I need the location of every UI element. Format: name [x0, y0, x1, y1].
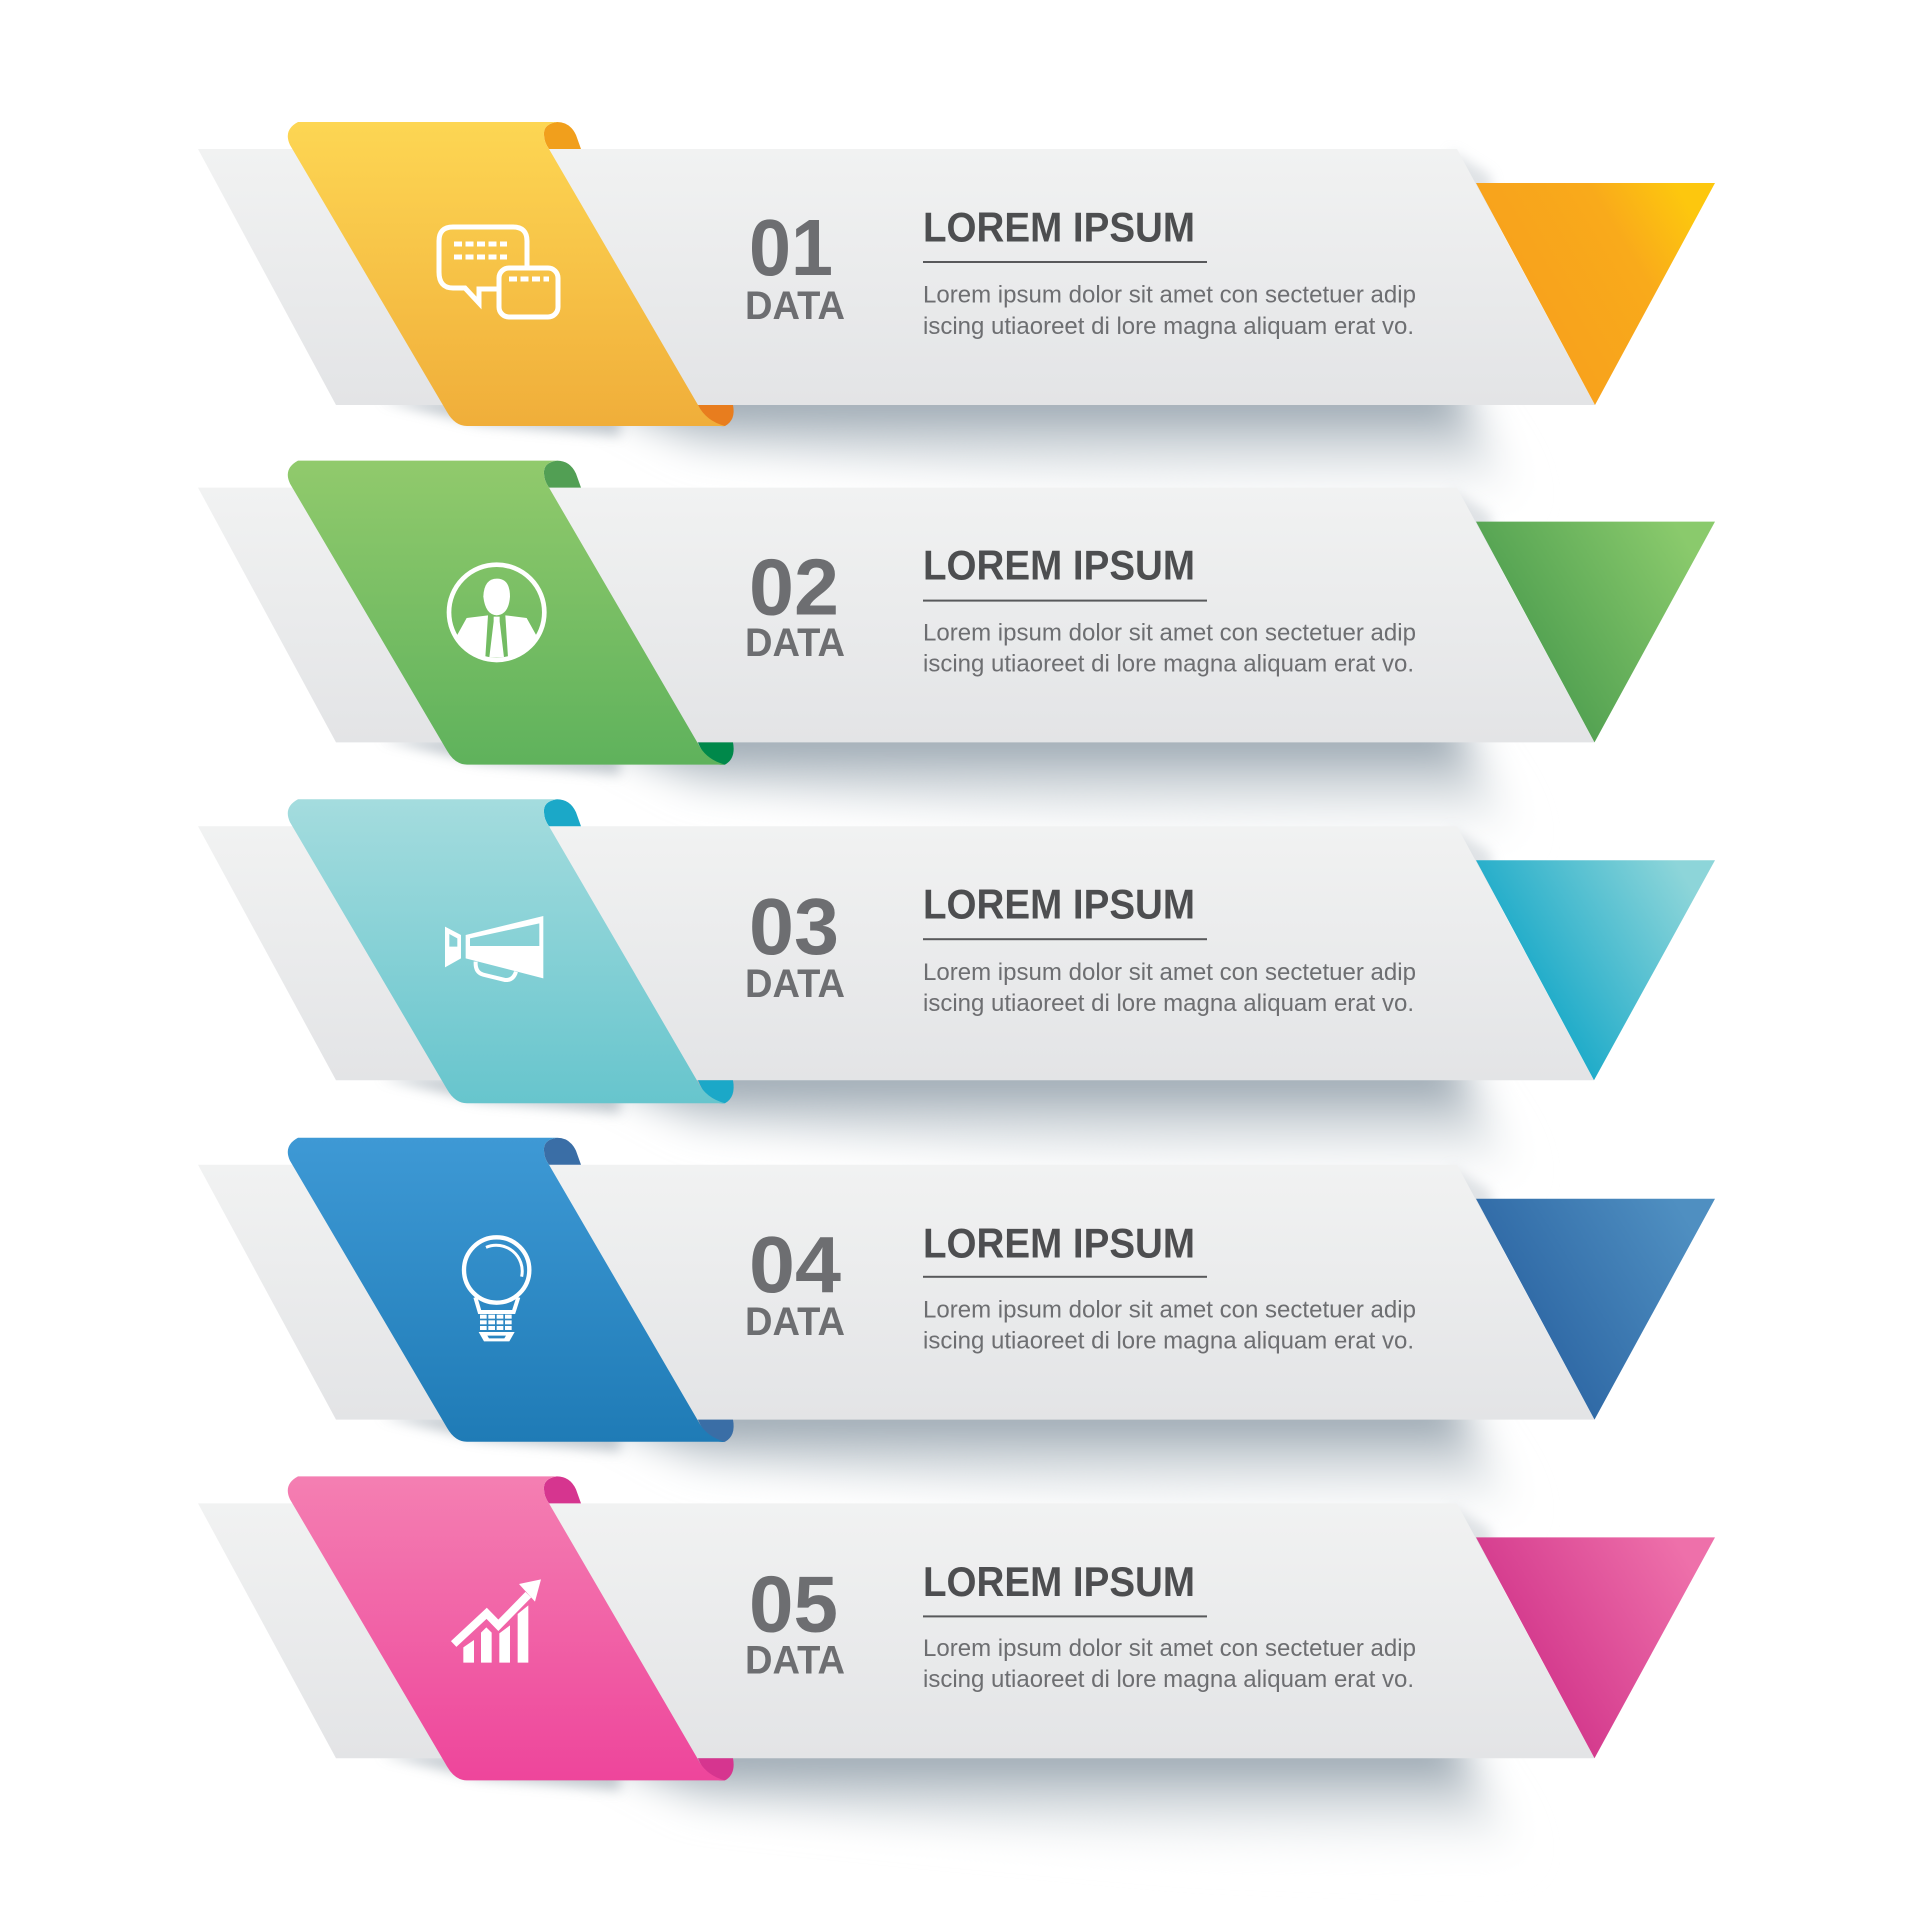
fold top — [544, 1476, 581, 1503]
heading: LOREM IPSUM — [923, 542, 1195, 589]
body text — [923, 959, 1416, 1017]
data label: DATA — [745, 1300, 845, 1344]
triangle — [1476, 860, 1715, 1080]
body text: Lorem ipsum dolor sit amet con sectetuer adip — [923, 959, 1416, 986]
body text: iscing utiaoreet di lore magna aliquam erat vo. — [923, 990, 1414, 1017]
band — [198, 488, 1594, 742]
triangle — [1476, 522, 1715, 742]
icon: growth chart — [454, 1579, 541, 1663]
icon: megaphone — [445, 916, 543, 980]
body text: Lorem ipsum dolor sit amet con sectetuer adip — [923, 1635, 1416, 1662]
divider — [923, 1615, 1207, 1617]
panel: row 01 — [198, 122, 1715, 510]
panel: row 04 — [198, 1138, 1715, 1526]
shadow — [380, 150, 1530, 510]
triangle — [1476, 183, 1715, 405]
data label: DATA — [745, 962, 845, 1006]
panel: row 05 — [198, 1476, 1715, 1864]
divider — [923, 1276, 1207, 1278]
fold bottom — [698, 1080, 734, 1103]
body text — [923, 619, 1416, 677]
fold bottom — [698, 1758, 734, 1781]
data label: DATA — [745, 621, 845, 665]
heading: LOREM IPSUM — [923, 204, 1195, 250]
band — [198, 826, 1594, 1080]
data label: DATA — [745, 1638, 845, 1682]
fold bottom — [698, 1420, 734, 1442]
number: 02 — [749, 543, 839, 632]
heading: LOREM IPSUM — [923, 881, 1195, 928]
divider — [923, 938, 1207, 940]
shadow — [380, 827, 1530, 1187]
fold top — [544, 1138, 581, 1165]
triangle — [1476, 1199, 1715, 1420]
body text — [923, 1635, 1416, 1693]
body text: iscing utiaoreet di lore magna aliquam erat vo. — [923, 313, 1414, 340]
ribbon — [288, 461, 725, 765]
number: 01 — [749, 203, 833, 292]
triangle — [1476, 1537, 1715, 1758]
divider — [923, 600, 1207, 602]
ribbon — [288, 799, 725, 1103]
ribbon — [288, 1138, 725, 1442]
shadow — [380, 1166, 1530, 1526]
band — [198, 1165, 1594, 1420]
band — [198, 149, 1595, 405]
icon: person — [449, 565, 544, 660]
body text: Lorem ipsum dolor sit amet con sectetuer adip — [923, 282, 1416, 308]
body text: iscing utiaoreet di lore magna aliquam erat vo. — [923, 650, 1414, 677]
body text: iscing utiaoreet di lore magna aliquam erat vo. — [923, 1328, 1414, 1355]
data label: DATA — [745, 284, 845, 328]
body text — [923, 282, 1416, 340]
shadow — [380, 1504, 1530, 1864]
number: 05 — [749, 1559, 838, 1648]
ribbon — [288, 122, 725, 426]
divider — [923, 261, 1207, 263]
heading: LOREM IPSUM — [923, 1558, 1195, 1605]
body text: iscing utiaoreet di lore magna aliquam erat vo. — [923, 1666, 1414, 1693]
fold top — [544, 122, 581, 149]
shadow — [380, 489, 1530, 849]
icon: light bulb — [464, 1237, 529, 1341]
heading: LOREM IPSUM — [923, 1219, 1195, 1266]
fold top — [544, 461, 581, 488]
icon: chat bubbles — [439, 227, 558, 317]
band — [198, 1503, 1594, 1758]
number: 03 — [749, 882, 839, 971]
body text — [923, 1297, 1416, 1355]
ribbon — [288, 1476, 725, 1780]
fold bottom — [698, 405, 734, 426]
number: 04 — [749, 1220, 842, 1309]
panel: row 02 — [198, 461, 1715, 849]
fold bottom — [698, 742, 734, 765]
body text: Lorem ipsum dolor sit amet con sectetuer adip — [923, 619, 1416, 646]
fold top — [544, 799, 581, 826]
panel: row 03 — [198, 799, 1715, 1187]
body text: Lorem ipsum dolor sit amet con sectetuer adip — [923, 1297, 1416, 1324]
